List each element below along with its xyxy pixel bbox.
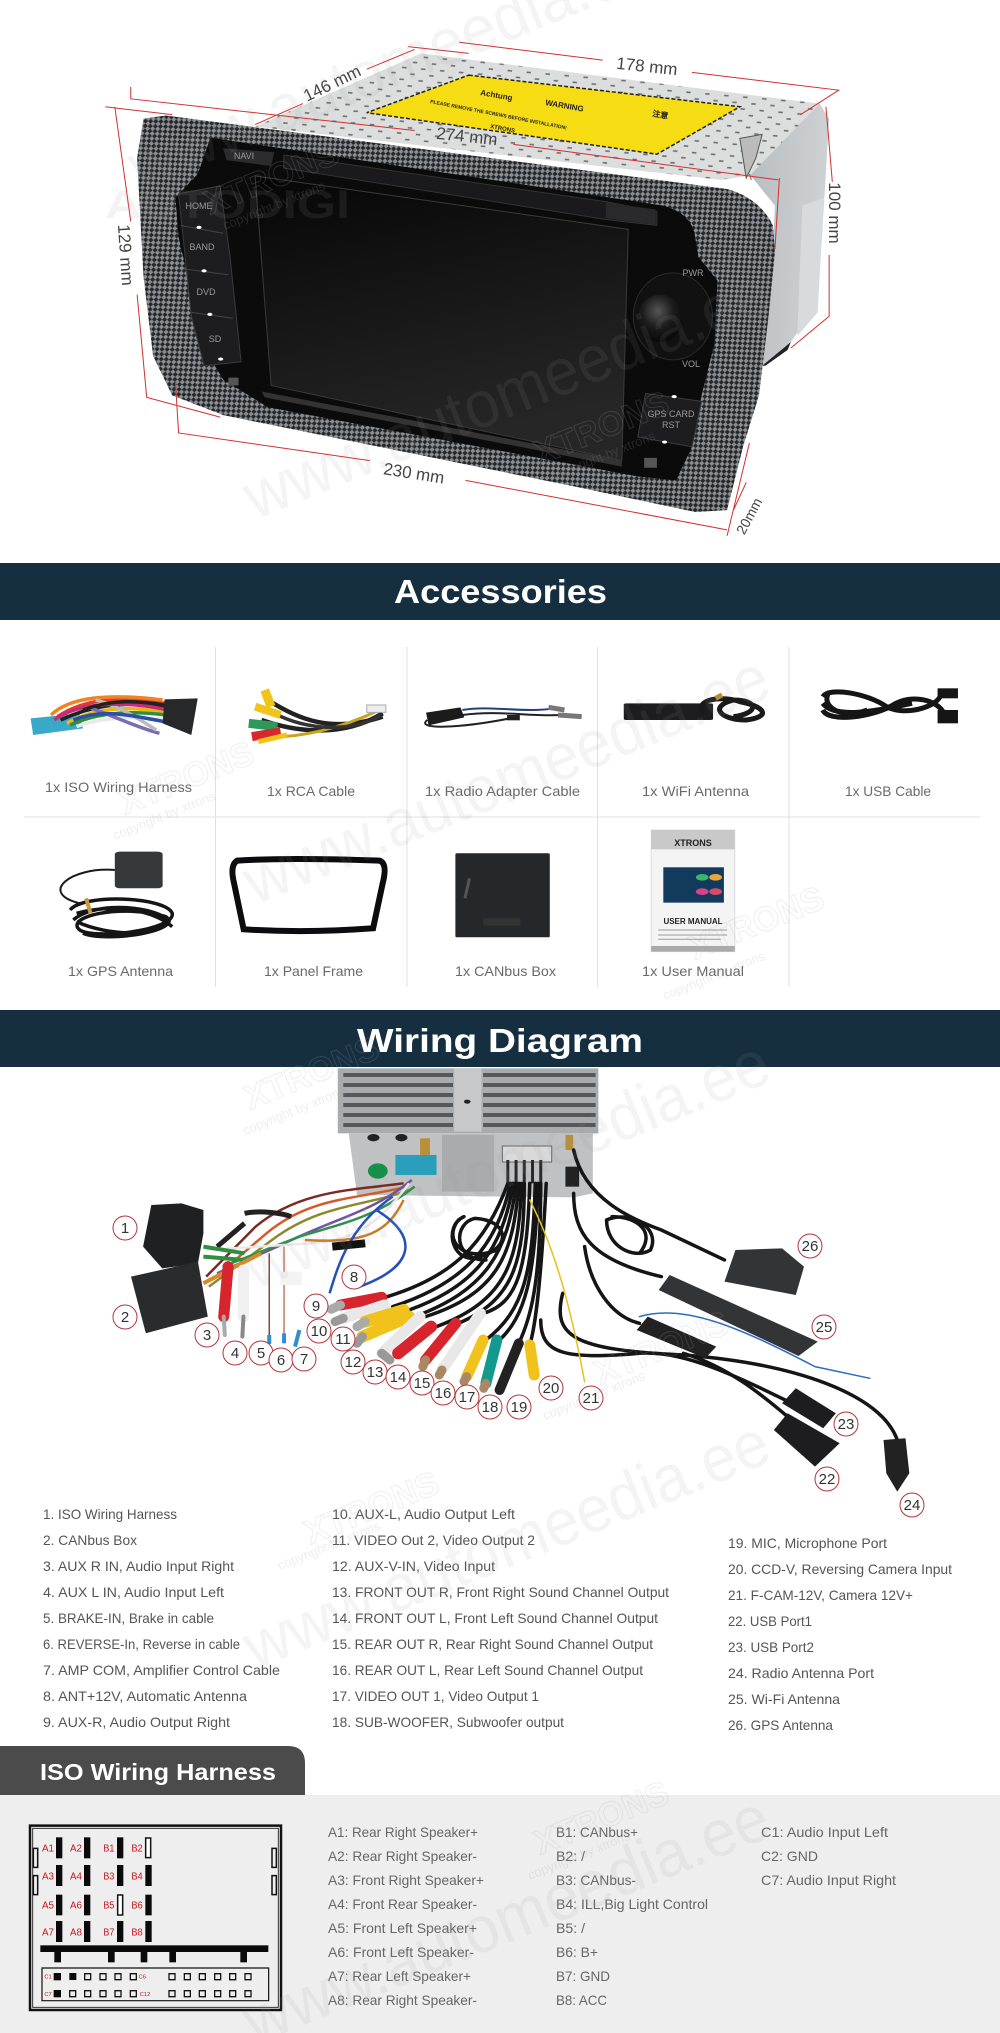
numbered callouts: 8 <box>350 1269 358 1286</box>
numbered callouts: 20 <box>543 1380 559 1397</box>
captions: 1x USB Cable <box>845 783 931 799</box>
wiring legend: column 1: 5. BRAKE-IN, Brake in cable <box>43 1610 214 1626</box>
pin list B: B5: / <box>556 1920 585 1936</box>
device button labels: GPS CARD <box>647 409 695 419</box>
left button strip <box>179 186 241 366</box>
numbered callouts: 2 <box>121 1309 129 1326</box>
panel: accessories grid <box>24 647 980 987</box>
numbered callouts: 1 <box>121 1220 129 1237</box>
GPS puck <box>724 1248 804 1295</box>
wiring legend: column 2: 15. REAR OUT R, Rear Right Sound Channel Output <box>332 1636 653 1652</box>
dimension: 178 mm: 178 mm <box>615 54 678 79</box>
wiring legend: column 2 <box>332 1506 669 1730</box>
black bezel <box>175 138 718 480</box>
icon: panel frame <box>232 859 385 931</box>
captions: 1x WiFi Antenna <box>642 783 749 799</box>
top plate with perforations <box>255 53 820 180</box>
head unit rear heat sink <box>338 1068 598 1133</box>
watermarks: copyright by xtrons <box>221 178 328 233</box>
RCA plugs and black cables <box>224 1150 897 1440</box>
icon: RCA cable <box>249 690 386 742</box>
connector pin diagram: B3 <box>103 1871 115 1882</box>
wiring legend: column 2: 16. REAR OUT L, Rear Left Sound Channel Output <box>332 1662 643 1678</box>
grid lines <box>24 647 980 987</box>
pin list B: B2: / <box>556 1848 585 1864</box>
wiring legend: column 3 <box>728 1535 952 1733</box>
wiring legend: column 3: 20. CCD-V, Reversing Camera Input <box>728 1561 952 1577</box>
volume knob <box>633 273 712 360</box>
icon: USB cable <box>823 688 958 723</box>
dimension: 230 mm: 230 mm <box>382 459 446 488</box>
screen <box>255 176 628 461</box>
connector pin diagram: B5 <box>103 1900 115 1911</box>
numbered callouts: 19 <box>511 1399 527 1416</box>
bracket hook <box>740 134 762 178</box>
watermarks: XTRONS <box>299 1464 444 1552</box>
wiring legend: column 2: 10. AUX-L, Audio Output Left <box>332 1506 515 1522</box>
numbered callouts <box>113 1216 924 1517</box>
metal side of chassis <box>749 104 829 366</box>
numbered callouts: 17 <box>459 1389 475 1406</box>
watermarks: www.automeedia.ee <box>232 1025 779 1303</box>
WiFi antenna bar <box>659 1275 818 1356</box>
dimension: 274 mm: 274 mm <box>435 124 498 149</box>
label: warning sticker text: WARNING <box>545 98 584 114</box>
dimension: 20 mm: 20mm <box>733 495 765 537</box>
connector pin diagram: B7 <box>103 1927 115 1938</box>
captions: 1x GPS Antenna <box>68 963 173 979</box>
icon: CANbus box <box>455 853 550 937</box>
numbered callouts: 10 <box>311 1323 327 1340</box>
watermarks: XTRONS <box>529 384 674 472</box>
watermarks: XTRONS <box>684 879 829 967</box>
device button labels: SD <box>209 334 222 344</box>
tab heading <box>0 1746 305 1795</box>
watermarks: XTRONS <box>199 134 344 222</box>
wiring legend: column 1: 9. AUX-R, Audio Output Right <box>43 1714 230 1730</box>
pin list A: A5: Front Left Speaker+ <box>328 1920 477 1936</box>
pin list B: B4: ILL,Big Light Control <box>556 1896 708 1912</box>
wiring legend: column 1: 2. CANbus Box <box>43 1532 137 1548</box>
wiring legend: column 3: 26. GPS Antenna <box>728 1717 833 1733</box>
connector pin diagram: B2 <box>131 1843 143 1854</box>
wiring legend: column 2: 17. VIDEO OUT 1, Video Output 1 <box>332 1688 539 1704</box>
wiring legend: column 3: 24. Radio Antenna Port <box>728 1665 874 1681</box>
label: warning sticker text: Achtung <box>480 88 513 103</box>
numbered callouts: 4 <box>231 1345 239 1362</box>
numbered callouts: 15 <box>414 1375 430 1392</box>
connector pin diagram <box>30 1826 281 2010</box>
wiring legend: column 1: 3. AUX R IN, Audio Input Right <box>43 1558 234 1574</box>
wiring diagram photo <box>113 1068 924 1517</box>
dimension: 129 mm: 129 mm <box>114 224 137 286</box>
device illustration <box>105 42 839 536</box>
numbered callouts: 6 <box>277 1352 285 1369</box>
connector pin diagram: A8 <box>70 1927 82 1938</box>
watermarks: XTRONS <box>589 1304 734 1392</box>
numbered callouts: 21 <box>583 1390 599 1407</box>
numbered callouts: 26 <box>802 1238 818 1255</box>
watermarks: www.automeedia.ee <box>232 255 779 533</box>
device button labels: DVD <box>196 287 216 297</box>
pin list C: C7: Audio Input Right <box>761 1872 896 1888</box>
watermarks: AUTODIGI <box>105 183 350 227</box>
pin list C <box>761 1824 896 1888</box>
connector pin diagram: A3 <box>42 1871 54 1882</box>
wiring legend: column 1: 6. REVERSE-In, Reverse in cable <box>43 1636 240 1652</box>
head unit rear panel <box>349 1133 593 1197</box>
section bar: Accessories <box>0 563 1000 620</box>
device button labels: NAVI <box>234 151 254 161</box>
pin list A: A3: Front Right Speaker+ <box>328 1872 484 1888</box>
manual cover text <box>663 838 723 926</box>
section bar: Accessories: Accessories <box>394 573 607 610</box>
numbered callouts: 16 <box>435 1385 451 1402</box>
captions: 1x Panel Frame <box>264 963 363 979</box>
pin list A <box>328 1824 484 2008</box>
watermarks: XTRONS <box>239 1029 384 1117</box>
pin list A: A7: Rear Left Speaker+ <box>328 1968 471 1984</box>
tab heading: ISO Wiring Harness <box>40 1759 276 1785</box>
connector pin diagram: A7 <box>42 1927 54 1938</box>
watermarks: www.automeedia.ee <box>232 640 779 918</box>
device button labels: PWR <box>682 268 704 278</box>
connector pin diagram: A4 <box>70 1871 82 1882</box>
connector pin diagram: C1 <box>44 1975 52 1981</box>
wiring legend: column 2: 12. AUX-V-IN, Video Input <box>332 1558 495 1574</box>
device button labels: VOL <box>682 359 700 369</box>
wiring legend: column 1: 8. ANT+12V, Automatic Antenna <box>43 1688 247 1704</box>
numbered callouts: 24 <box>904 1497 920 1514</box>
numbered callouts: 9 <box>312 1298 320 1315</box>
wiring legend: column 3: 19. MIC, Microphone Port <box>728 1535 887 1551</box>
wiring legend: column 2: 11. VIDEO Out 2, Video Output 2 <box>332 1532 535 1548</box>
numbered callouts: 5 <box>257 1345 265 1362</box>
pin list C: C2: GND <box>761 1848 818 1864</box>
connector pin diagram: A2 <box>70 1843 82 1854</box>
thin stub wires 5 6 7 <box>269 1247 302 1347</box>
numbered callouts: 3 <box>203 1327 211 1344</box>
wiring legend: column 3: 23. USB Port2 <box>728 1639 814 1655</box>
wiring legend: column 3: 21. F-CAM-12V, Camera 12V+ <box>728 1587 913 1603</box>
label: warning sticker text: PLEASE REMOVE THE SCREWS BEFORE INSTALLATION! <box>430 99 568 132</box>
connector pin diagram: A1 <box>42 1843 54 1854</box>
accessory images <box>31 688 958 952</box>
section bar: Wiring Diagram: Wiring Diagram <box>357 1022 643 1059</box>
wiring legend: column 2: 13. FRONT OUT R, Front Right Sound Channel Output <box>332 1584 669 1600</box>
wiring legend: column 3: 25. Wi-Fi Antenna <box>728 1691 840 1707</box>
pin list B: B8: ACC <box>556 1992 607 2008</box>
pin list A: A2: Rear Right Speaker- <box>328 1848 477 1864</box>
numbered callouts: 25 <box>816 1319 832 1336</box>
pin list B: B1: CANbus+ <box>556 1824 638 1840</box>
pin list C: C1: Audio Input Left <box>761 1824 888 1840</box>
connector pin diagram: C12 <box>140 1992 150 1998</box>
numbered callouts: 7 <box>300 1351 308 1368</box>
connector pin diagram: A6 <box>70 1900 82 1911</box>
watermarks: copyright by xtrons <box>551 428 658 483</box>
watermarks: XTRONS <box>529 1774 674 1862</box>
device button labels: HOME <box>186 201 212 211</box>
icon: radio adapter cable <box>425 707 582 727</box>
numbered callouts: 13 <box>367 1364 383 1381</box>
wiring legend: column 3: 22. USB Port1 <box>728 1613 812 1629</box>
icon: GPS antenna <box>60 852 172 937</box>
device button labels: BAND <box>189 242 215 252</box>
connector pin diagram: B1 <box>103 1843 115 1854</box>
watermarks: copyright by xtrons <box>111 788 218 843</box>
pin list A: A4: Front Rear Speaker- <box>328 1896 477 1912</box>
dimension: 100 mm: 100 mm <box>825 182 844 244</box>
pin list B: B7: GND <box>556 1968 610 1984</box>
coloured harness wires <box>203 1180 415 1293</box>
connector pin diagram: B8 <box>131 1927 143 1938</box>
watermarks <box>105 0 829 2033</box>
manual cover text: USER MANUAL <box>663 917 723 926</box>
carbon faceplate <box>137 115 775 512</box>
connector pin diagram: B6 <box>131 1900 143 1911</box>
pin list B: B6: B+ <box>556 1944 598 1960</box>
yellow warning label <box>367 75 740 154</box>
pin list A: A6: Front Left Speaker- <box>328 1944 474 1960</box>
panel: ISO wiring harness <box>0 1746 1000 2033</box>
wiring legend: column 2: 18. SUB-WOOFER, Subwoofer output <box>332 1714 564 1730</box>
connector 1: ISO plug <box>143 1203 203 1268</box>
watermarks: copyright by xtrons <box>526 1828 633 1883</box>
connector pin diagram: A5 <box>42 1900 54 1911</box>
pin list B: B3: CANbus- <box>556 1872 636 1888</box>
icon: user manual <box>651 830 735 952</box>
ferrite block and USB plugs <box>637 1317 909 1492</box>
label: warning sticker text <box>430 88 669 135</box>
dimension lines <box>105 42 839 536</box>
captions: 1x Radio Adapter Cable <box>425 783 580 799</box>
connector pin diagram: C7 <box>44 1992 52 1998</box>
connector pin diagram: B4 <box>131 1871 143 1882</box>
wiring legend: column 2: 14. FRONT OUT L, Front Left Sound Channel Output <box>332 1610 658 1626</box>
wiring legend: column 1: 4. AUX L IN, Audio Input Left <box>43 1584 224 1600</box>
connector 2: CANbus box <box>131 1262 208 1333</box>
watermarks: copyright by xtrons <box>276 1518 383 1573</box>
watermarks: copyright by xtrons <box>241 1083 348 1138</box>
watermarks: www.automeedia.ee <box>232 1405 779 1683</box>
label: warning sticker text: XTRONS <box>490 124 515 135</box>
numbered callouts: 12 <box>345 1354 361 1371</box>
captions: 1x RCA Cable <box>267 783 355 799</box>
icon: WiFi antenna <box>624 695 762 720</box>
pin list A: A8: Rear Right Speaker- <box>328 1992 477 2008</box>
watermarks: copyright by xtrons <box>661 948 768 1003</box>
numbered callouts: 14 <box>390 1369 406 1386</box>
panel: product photo with dimensions <box>105 42 844 537</box>
section bar: Wiring Diagram <box>0 1010 1000 1067</box>
captions <box>45 779 931 979</box>
watermarks: copyright by xtrons <box>541 1368 648 1423</box>
watermarks: XTRONS <box>114 734 259 822</box>
numbered callouts: 18 <box>482 1399 498 1416</box>
connector pin diagram: C6 <box>139 1975 146 1981</box>
captions: 1x User Manual <box>642 963 744 979</box>
dimension: 146 mm: 146 mm <box>300 61 364 105</box>
captions: 1x CANbus Box <box>455 963 556 979</box>
manual cover text: XTRONS <box>674 838 712 848</box>
navi key and disc slot <box>223 148 274 166</box>
pin list A: A1: Rear Right Speaker+ <box>328 1824 478 1840</box>
captions: 1x ISO Wiring Harness <box>45 779 192 795</box>
icon: ISO wiring harness <box>31 697 198 735</box>
wiring legend: column 1: 7. AMP COM, Amplifier Control Cable <box>43 1662 280 1678</box>
pin list B <box>556 1824 708 2008</box>
right button strip <box>638 393 702 447</box>
device button labels <box>186 151 704 430</box>
grey panel background <box>0 1795 1000 2033</box>
device button labels: RST <box>662 420 681 430</box>
numbered callouts: 11 <box>335 1331 351 1348</box>
numbered callouts: 23 <box>838 1416 854 1433</box>
wiring legend: column 1: 1. ISO Wiring Harness <box>43 1506 177 1522</box>
label: warning sticker text: 注意 <box>652 108 669 121</box>
numbered callouts: 22 <box>819 1471 835 1488</box>
wiring legend: column 1 <box>43 1506 280 1730</box>
